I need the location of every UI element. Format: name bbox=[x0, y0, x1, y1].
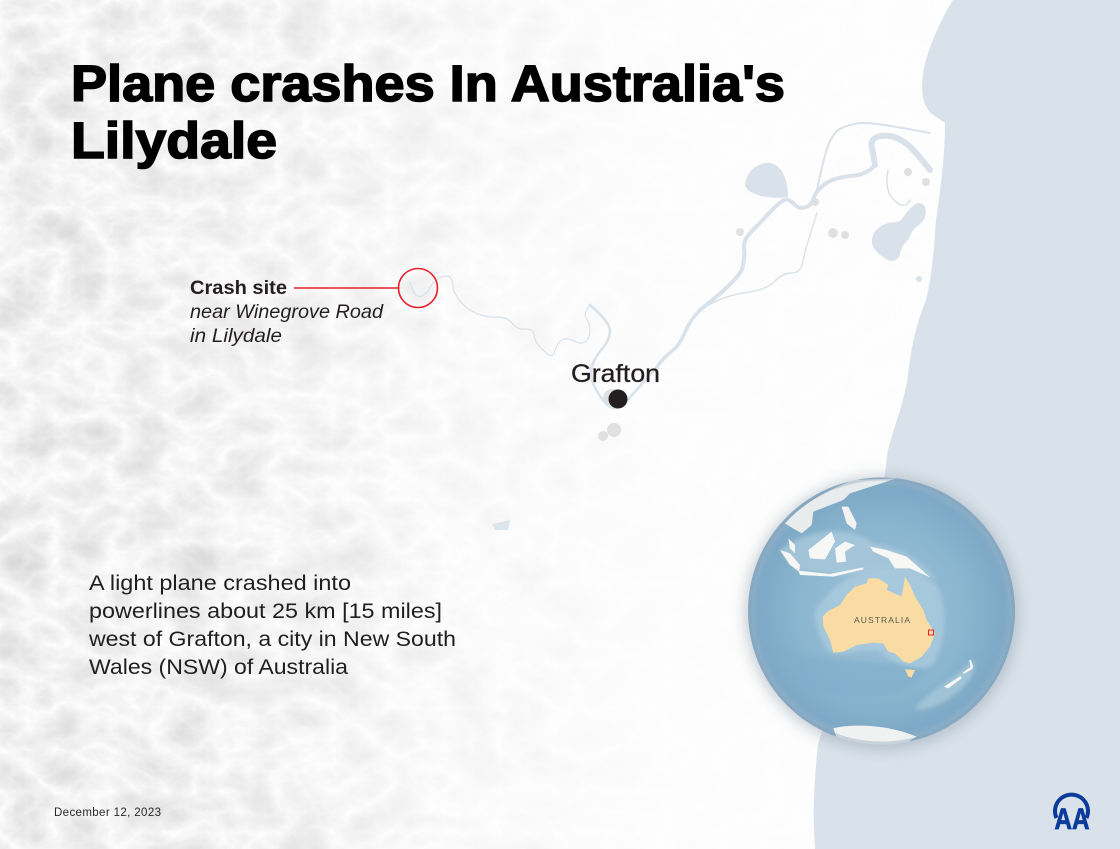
land: New Zealand bbox=[944, 676, 962, 688]
lake: southern lakes bbox=[872, 203, 926, 261]
title: Plane crashes In Australia's bbox=[71, 55, 785, 112]
crash site label: near Winegrove Road bbox=[190, 302, 384, 323]
sea bbox=[814, 0, 1120, 849]
title: Lilydale bbox=[71, 112, 277, 169]
crash site label: in Lilydale bbox=[190, 326, 282, 347]
globe label: Australia: AUSTRALIA bbox=[854, 615, 910, 625]
land: Sumatra bbox=[780, 550, 800, 572]
description text bbox=[88, 572, 456, 679]
logo: Anadolu Agency: AA bbox=[1054, 803, 1090, 836]
land: New Guinea bbox=[870, 547, 930, 577]
land: Malay peninsula bbox=[788, 538, 795, 553]
logo: Anadolu Agency bbox=[1054, 795, 1090, 836]
land: Tasmania bbox=[905, 669, 915, 677]
description text: west of Grafton, a city in New South bbox=[88, 628, 456, 651]
shallow shelf bbox=[815, 569, 944, 670]
land: Asia bbox=[785, 478, 897, 533]
description text: powerlines about 25 km [15 miles] bbox=[89, 600, 442, 623]
land: Java islands bbox=[798, 567, 863, 577]
description text: A light plane crashed into bbox=[89, 572, 351, 595]
land: Borneo bbox=[808, 532, 835, 559]
river: Clarence lower estuary bbox=[410, 123, 930, 408]
lake: small bbox=[916, 276, 922, 282]
lake: large western lake bbox=[745, 163, 788, 198]
land: Antarctica bbox=[833, 726, 917, 747]
globe locator bbox=[744, 476, 1018, 750]
title bbox=[71, 55, 785, 169]
locator box bbox=[928, 630, 934, 635]
city: Grafton: Grafton bbox=[571, 360, 660, 388]
date: December 12, 2023 bbox=[54, 807, 161, 819]
lake: inland patch bbox=[492, 520, 510, 530]
city: Grafton bbox=[571, 360, 660, 408]
crash site marker bbox=[294, 268, 438, 308]
land: Sulawesi bbox=[835, 542, 855, 563]
description text: Wales (NSW) of Australia bbox=[89, 656, 348, 679]
towns bbox=[598, 168, 930, 441]
river: upper Clarence to crash site bbox=[410, 276, 590, 356]
terrain hillshade bbox=[0, 0, 540, 849]
land: Philippines bbox=[842, 507, 857, 530]
lakes and rivers bbox=[410, 123, 930, 530]
crash site label bbox=[190, 278, 384, 347]
land: Australia bbox=[823, 577, 935, 663]
crash site label: Crash site bbox=[190, 278, 287, 299]
